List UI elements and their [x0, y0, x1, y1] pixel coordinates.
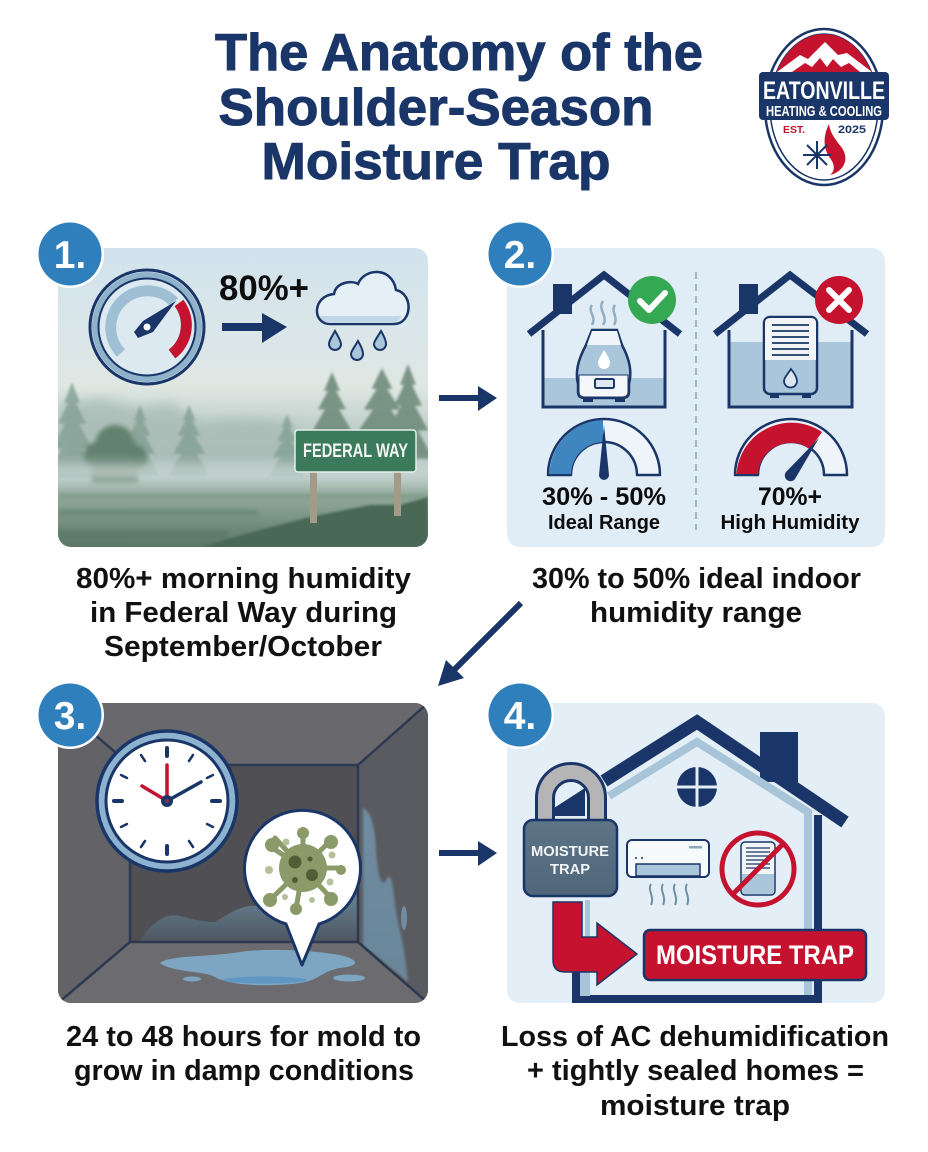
caption: step 2: 30% to 50% ideal indoor: [532, 563, 861, 595]
caption: step 4: [501, 1021, 889, 1122]
caption: step 1: 80%+ morning humidity: [76, 563, 411, 595]
caption: step 3: 24 to 48 hours for mold to: [66, 1021, 421, 1053]
logo: Eatonville Heating & Cooling: [759, 29, 889, 185]
gauge: high humidity: [735, 419, 847, 481]
title: The Anatomy of the: [215, 24, 703, 82]
icon: crossed-out dehumidifier: [722, 833, 794, 905]
house outline: [576, 722, 845, 999]
caption: step 1: in Federal Way during: [90, 597, 397, 629]
label: 70%+ High Humidity: High Humidity: [720, 512, 860, 534]
icon: round window: [676, 766, 718, 808]
badge: step 3: 3.: [54, 695, 86, 738]
icon: red cross: [815, 276, 863, 324]
logo: Eatonville Heating & Cooling: EATONVILLE: [763, 77, 885, 105]
label: moisture trap: MOISTURE TRAP: [656, 940, 854, 970]
arrow: step 2 to step 3: [438, 603, 521, 686]
label: 30% - 50% Ideal Range: [542, 483, 666, 534]
step 1 panel: morning humidity: [58, 248, 428, 547]
caption: step 1: [76, 563, 411, 663]
caption: step 2: [532, 563, 861, 629]
step 3 panel: mold growth: [58, 703, 428, 1003]
label: 30% - 50% Ideal Range: 30% - 50%: [542, 483, 666, 511]
badge: step 3: [36, 681, 104, 749]
arrow: step 1 to step 2: [439, 386, 497, 411]
caption: step 4: + tightly sealed homes =: [527, 1055, 864, 1087]
title: Shoulder-Season: [218, 79, 654, 137]
label: moisture trap: [644, 930, 866, 980]
badge: step 4: [486, 681, 554, 749]
caption: step 4: Loss of AC dehumidification: [501, 1021, 889, 1053]
callout: mold bubble: [244, 810, 360, 965]
icon: clock: [97, 731, 237, 871]
logo: Eatonville Heating & Cooling: EST.: [783, 125, 805, 136]
icon: green check: [628, 276, 676, 324]
caption: step 3: grow in damp conditions: [74, 1055, 414, 1087]
road sign: Federal Way: FEDERAL WAY: [303, 441, 408, 462]
label: 70%+ High Humidity: 70%+: [758, 483, 822, 511]
badge: step 2: [486, 220, 554, 288]
damp room: [58, 703, 428, 1003]
arrow: step 3 to step 4: [439, 841, 497, 866]
logo: Eatonville Heating & Cooling: HEATING & COOLING: [766, 103, 882, 120]
road sign: Federal Way: [295, 430, 416, 523]
caption: step 3: [66, 1021, 421, 1087]
label: 30% - 50% Ideal Range: Ideal Range: [548, 512, 660, 534]
gauge: ideal range: [548, 419, 660, 480]
title: Moisture Trap: [262, 133, 610, 191]
caption: step 1: September/October: [104, 631, 382, 663]
badge: step 1: 1.: [54, 234, 86, 277]
logo: Eatonville Heating & Cooling: 2025: [838, 124, 866, 136]
step 4 panel: moisture trap house: [507, 703, 885, 1003]
stat: 80%+: 80%+: [219, 269, 309, 308]
icon: padlock: TRAP: [550, 862, 590, 878]
caption: step 4: moisture trap: [600, 1090, 790, 1122]
icon: humidity gauge: [90, 270, 204, 384]
badge: step 4: 4.: [504, 695, 536, 738]
caption: step 2: humidity range: [590, 597, 802, 629]
house with humidifier: [529, 275, 680, 407]
icon: air conditioner: [627, 840, 709, 905]
arrow: red elbow: [553, 902, 637, 985]
icon: padlock: MOISTURE: [531, 844, 609, 860]
arrow to rain cloud: [222, 313, 287, 343]
icon: mold spore: [263, 827, 346, 915]
badge: step 2: 2.: [504, 234, 536, 277]
icon: rain cloud: [317, 272, 409, 360]
icon: padlock: [524, 772, 617, 936]
title: [215, 24, 703, 191]
house with dehumidifier: [715, 275, 867, 407]
label: 70%+ High Humidity: [720, 483, 860, 534]
step 2 panel: ideal indoor range: [507, 248, 885, 547]
badge: step 1: [36, 220, 104, 288]
foggy landscape: [58, 248, 428, 547]
